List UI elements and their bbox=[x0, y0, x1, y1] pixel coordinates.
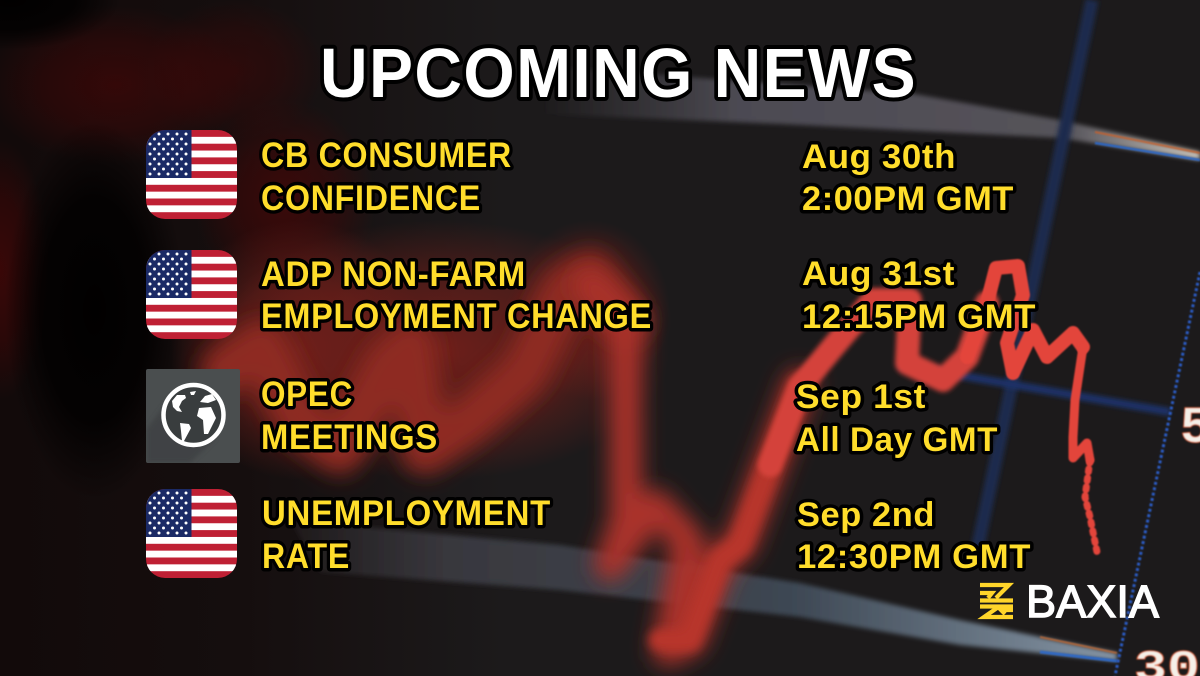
date and time: Sep 1st bbox=[796, 378, 926, 416]
grey light streaks bbox=[540, 66, 1200, 160]
date and time: All Day GMT bbox=[796, 421, 998, 459]
event name: MEETINGS bbox=[261, 418, 438, 457]
event name: UNEMPLOYMENT bbox=[262, 494, 551, 533]
event name: CB CONSUMER bbox=[261, 136, 512, 175]
red chart line, soft part bbox=[225, 275, 625, 450]
event name bbox=[262, 494, 551, 576]
logo: Baxia bbox=[980, 576, 1159, 627]
row 3: OPEC Meetings bbox=[146, 369, 998, 463]
event name bbox=[261, 375, 438, 457]
icon: US flag bbox=[146, 130, 237, 219]
icon: globe bbox=[146, 369, 240, 463]
date and time: Aug 30th bbox=[802, 138, 956, 176]
date and time: Sep 2nd bbox=[797, 496, 935, 534]
blue grid lines bbox=[975, 0, 1092, 560]
title: UPCOMING NEWS bbox=[320, 34, 917, 112]
event name: EMPLOYMENT CHANGE bbox=[261, 297, 652, 336]
event name: ADP NON-FARM bbox=[261, 255, 526, 294]
icon: US flag bbox=[146, 250, 237, 339]
event name bbox=[261, 255, 652, 336]
row 2: ADP Non-Farm Employment Change bbox=[146, 250, 1036, 339]
event name: OPEC bbox=[261, 375, 353, 414]
event name bbox=[261, 136, 512, 218]
date and time bbox=[796, 378, 998, 459]
event name: CONFIDENCE bbox=[261, 179, 481, 218]
date and time: Aug 31st bbox=[802, 255, 955, 293]
icon: US flag bbox=[146, 489, 237, 578]
date and time: 2:00PM GMT bbox=[802, 180, 1014, 218]
date and time bbox=[797, 496, 1031, 576]
red chart line, sharp part bbox=[770, 300, 987, 465]
date and time: 12:30PM GMT bbox=[797, 538, 1031, 576]
row 4: Unemployment Rate bbox=[146, 489, 1031, 578]
wordmark: BAXIA bbox=[1026, 576, 1159, 627]
event name: RATE bbox=[262, 537, 350, 576]
date and time: 12:15PM GMT bbox=[802, 298, 1036, 336]
row 1: CB Consumer Confidence bbox=[146, 130, 1014, 219]
date and time bbox=[802, 138, 1014, 218]
icon: Baxia mark bbox=[980, 585, 1013, 617]
date and time bbox=[802, 255, 1036, 336]
